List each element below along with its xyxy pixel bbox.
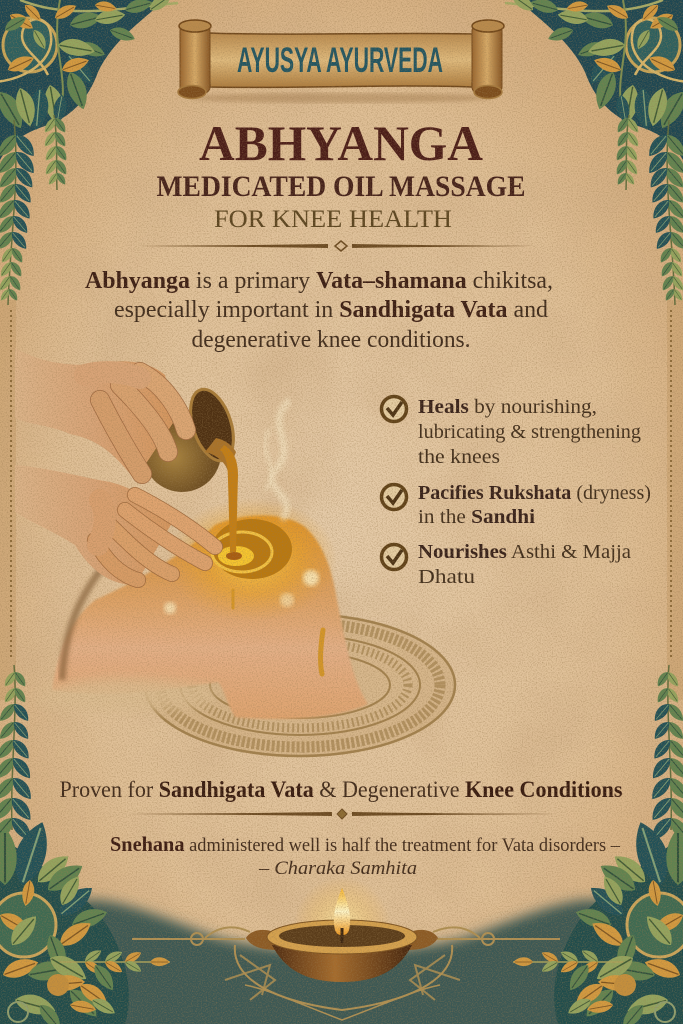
intro paragraph: [85, 268, 553, 353]
title: ABHYANGA: [199, 115, 483, 171]
oil pot: [143, 384, 242, 492]
knee: [52, 515, 368, 719]
benefit 1: Heals by nourishing,: [418, 396, 597, 418]
lamp bowl: [272, 945, 412, 982]
benefit 3: Dhatu: [418, 566, 475, 588]
oil stream: [220, 445, 238, 552]
benefit 1: the knees: [418, 446, 500, 468]
benefit 3: Nourishes Asthi & Majja: [418, 541, 631, 563]
scroll text: AYUSYA AYURVEDA: [237, 41, 443, 80]
foliage: top right corner: [505, 0, 683, 305]
pouring hand: [15, 348, 186, 480]
scroll banner: [178, 20, 504, 103]
benefit 2: Pacifies Rukshata (dryness): [418, 482, 651, 504]
subtitle: MEDICATED OIL MASSAGE: [156, 170, 526, 203]
lamp handles: [246, 930, 438, 950]
lamp ornament: [132, 927, 560, 1020]
foliage: top left corner: [0, 0, 178, 305]
check icon: [382, 484, 406, 510]
top divider: [138, 241, 535, 251]
quote: Snehana administered well is half the treatment for Vata disorders –: [110, 832, 620, 856]
thigh shadow: [62, 568, 102, 680]
illustration: oil massage on knee: [15, 348, 455, 756]
check icon: [382, 544, 406, 570]
foliage: bottom left corner: [0, 665, 170, 1024]
steam: [272, 400, 290, 520]
benefit 1: lubricating & strengthening: [418, 421, 641, 443]
benefit 2: in the Sandhi: [418, 506, 535, 528]
mandala under knee: [145, 614, 455, 756]
oil pool: [167, 498, 337, 622]
benefit 2: [382, 482, 651, 528]
dark teal ground band: [0, 900, 683, 1024]
lower divider: [124, 809, 555, 819]
intro paragraph: especially important in Sandhigata Vata and: [114, 297, 548, 323]
proven statement: Proven for Sandhigata Vata & Degenerative Knee Conditions: [60, 777, 623, 802]
massaging hand: [15, 465, 215, 585]
quote source: – Charaka Samhita: [258, 858, 417, 879]
knee left fade: [30, 679, 215, 712]
oil lamp: [132, 877, 560, 1020]
benefit 3: [382, 541, 631, 588]
benefit 1: [382, 396, 641, 468]
flame: [334, 888, 350, 935]
tagline: FOR KNEE HEALTH: [214, 206, 452, 233]
drips and highlights: [321, 630, 323, 674]
intro paragraph: Abhyanga is a primary Vata–shamana chikitsa,: [85, 268, 553, 294]
dotted border left: [10, 310, 12, 660]
foliage: bottom right corner: [513, 665, 683, 1024]
check icon: [382, 396, 406, 422]
intro paragraph: degenerative knee conditions.: [192, 327, 470, 353]
dotted border right: [670, 310, 672, 660]
